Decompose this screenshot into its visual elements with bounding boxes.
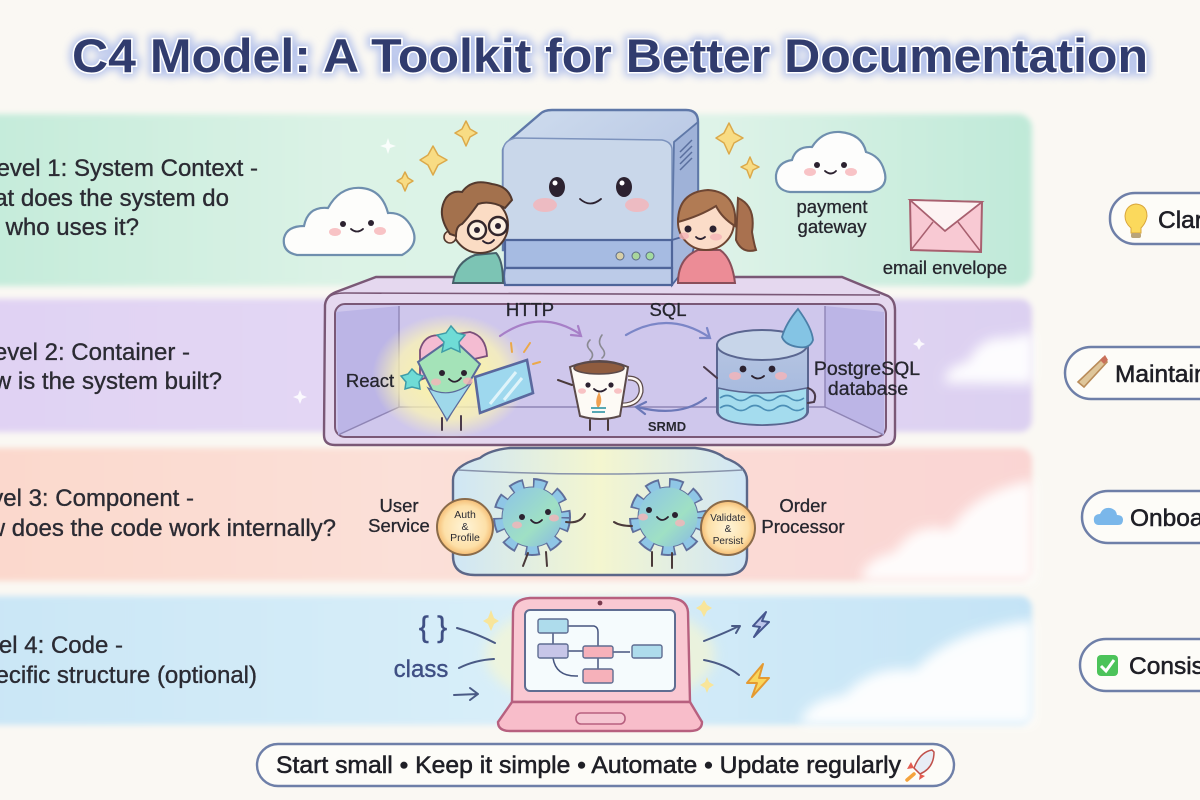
pill: Clarity: [1110, 193, 1200, 244]
arrow: HTTP: [500, 321, 581, 336]
icon: PostgreSQL database character: [704, 309, 815, 425]
label: payment gateway: [797, 196, 867, 237]
text: level 3: [0, 485, 336, 542]
icon: curly braces: { }: [419, 611, 447, 644]
sparkles on bands: [293, 138, 925, 404]
background cloud: level 2: [945, 332, 1034, 384]
icon: rocket: [907, 750, 934, 780]
icon: email envelope: [910, 200, 982, 252]
icon: sparkle stars right: [716, 123, 759, 178]
label: payment gateway: payment: [797, 196, 867, 217]
text: level 1: [0, 155, 258, 241]
icon: scroll: [1078, 355, 1108, 387]
band: level 2: [0, 299, 1032, 432]
footer pill: tips: Start small • Keep it simple • Automate • Update regularly: [276, 752, 902, 779]
label: React: React: [346, 370, 394, 391]
icon: green check: [1097, 655, 1118, 676]
title: C4 Model: A Toolkit for Better Documentation: [72, 29, 1148, 82]
pill: Maintainability: [1065, 347, 1200, 399]
badge: Auth & Profile: Auth: [454, 509, 476, 521]
icon: right gear character: [614, 485, 700, 568]
pill: Consistency: [1080, 639, 1200, 691]
label: payment gateway: gateway: [798, 216, 867, 237]
badge: Auth & Profile: Profile: [450, 532, 480, 544]
label: class: class: [394, 656, 448, 683]
icon: coffee cup character: [558, 335, 641, 430]
label: email envelope: email envelope: [883, 257, 1007, 278]
icon: yellow bolt: [747, 664, 769, 697]
background cloud: level 3: [862, 480, 1034, 582]
background cloud: level 4: [800, 620, 1034, 725]
chart: flow diagram on screen: [538, 619, 662, 683]
panel: container box: [324, 277, 895, 445]
icon: server character: [503, 110, 698, 285]
badge: Auth & Profile: &: [461, 521, 469, 533]
label: HTTP: HTTP: [506, 299, 554, 320]
icon: girl character: [678, 190, 756, 283]
icon: cloud: [1094, 508, 1123, 525]
pill: Onboarding: [1082, 491, 1200, 543]
label: PostgreSQL database: PostgreSQL: [814, 358, 920, 380]
footer pill: tips: [257, 744, 954, 786]
icon: left gear character: [500, 485, 585, 566]
text: level 2: [0, 339, 222, 395]
arrow: return: [636, 398, 706, 414]
label: User Service: [368, 495, 430, 536]
icon: laptop sparkles: [483, 600, 714, 693]
label: Order Processor: [761, 495, 845, 537]
arrows: laptop outputs: [704, 626, 740, 675]
band: level 4: [0, 596, 1032, 725]
arrows: code inputs: [454, 628, 495, 700]
label: Order Processor: Order: [779, 495, 827, 516]
badge: Validate & Persist: Persist: [713, 536, 744, 547]
icon: blue bolt: [753, 612, 769, 637]
label: PostgreSQL database: database: [828, 378, 908, 400]
badge: Validate & Persist: Validate: [710, 513, 746, 524]
label: return query: SRMD: [648, 419, 686, 434]
label: PostgreSQL database: [814, 358, 920, 400]
title: C4 Model: A Toolkit for Better Documentation: [72, 29, 1148, 82]
label: User Service: Service: [368, 515, 430, 536]
label: User Service: User: [379, 495, 419, 516]
icon: payment cloud: [776, 132, 885, 192]
icon: sparkle stars left: [397, 121, 477, 191]
panel: component glass box: [453, 448, 747, 575]
badge: Validate & Persist: [701, 501, 755, 555]
icon: React character: [372, 314, 540, 438]
band: level 3: [0, 448, 1032, 581]
label: SQL: SQL: [649, 299, 687, 320]
band: level 1: [0, 114, 1032, 286]
text: level 4: [0, 632, 257, 689]
arrow: SQL: [626, 323, 710, 338]
badge: Validate & Persist: &: [725, 524, 732, 535]
badge: Auth & Profile: [437, 499, 493, 555]
label: Order Processor: Processor: [761, 516, 845, 537]
icon: light bulb: [1125, 204, 1147, 238]
icon: left cloud: [284, 188, 414, 255]
icon: laptop: [485, 598, 715, 731]
icon: boy character: [442, 182, 512, 283]
